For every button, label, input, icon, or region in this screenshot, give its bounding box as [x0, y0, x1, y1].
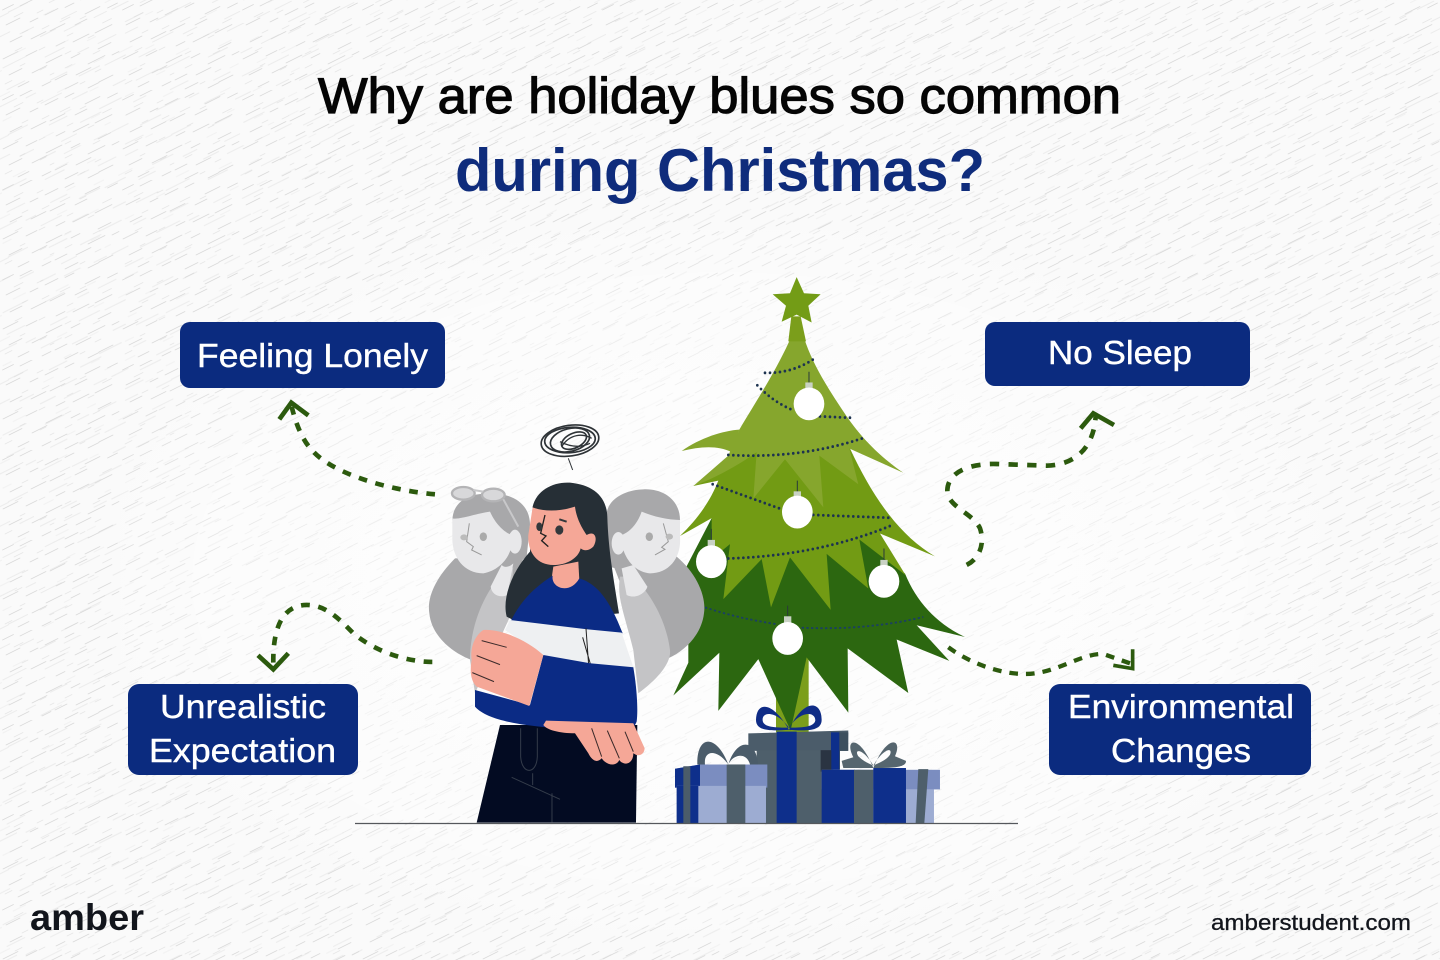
arrow: to Unrealistic Expectation	[258, 605, 432, 669]
title	[318, 68, 1121, 204]
lower hand	[543, 721, 645, 764]
label box: No Sleep	[985, 322, 1250, 386]
label box: Feeling Lonely	[180, 322, 445, 388]
scribble above head	[539, 421, 601, 470]
right gift bow	[842, 742, 906, 768]
title line 1: Why are holiday blues so common	[318, 68, 1121, 124]
amber logo: amber	[30, 897, 144, 938]
label box: Unrealistic Expectation	[128, 684, 358, 775]
neck	[551, 562, 579, 590]
sweater	[508, 576, 623, 633]
garlands	[705, 357, 923, 628]
tree upper tier	[682, 336, 903, 507]
arrow: to Feeling Lonely	[279, 403, 435, 494]
middle gift	[748, 731, 848, 823]
pants details	[512, 728, 560, 823]
upper hand	[471, 630, 543, 706]
gift bow navy	[756, 706, 822, 730]
title line 2: during Christmas?	[455, 137, 985, 204]
christmas tree	[673, 277, 965, 732]
gifts	[675, 706, 940, 823]
label box: Environmental Changes: Environmental	[1068, 688, 1294, 725]
label box: Feeling Lonely: Feeling Lonely	[197, 337, 429, 374]
tree star	[773, 277, 821, 322]
ghost figure left	[429, 487, 530, 693]
tree top cone	[788, 316, 806, 341]
trunk	[776, 656, 809, 732]
left gift	[675, 764, 767, 823]
sweater stripe	[505, 620, 633, 667]
ornaments	[696, 372, 899, 655]
label box: No Sleep: No Sleep	[1048, 334, 1192, 371]
face	[528, 507, 596, 565]
label box: Unrealistic Expectation: Unrealistic	[160, 688, 326, 725]
arrow: to No Sleep	[947, 413, 1114, 565]
pants	[477, 725, 637, 823]
right gift	[822, 768, 940, 823]
label box: Environmental Changes: Changes	[1111, 732, 1251, 769]
tree lower dark tier	[673, 518, 965, 731]
left gift bow	[697, 742, 758, 766]
tree middle tier	[680, 448, 935, 610]
face details	[541, 515, 548, 547]
woman with ghost figures	[429, 421, 704, 823]
label box: Environmental Changes	[1049, 684, 1311, 775]
ghost figure right	[607, 489, 704, 693]
label box: Unrealistic Expectation: Expectation	[149, 732, 336, 769]
hair back	[505, 483, 619, 623]
upper tier left spike	[682, 430, 739, 452]
website url: amberstudent.com	[1211, 910, 1411, 935]
sleeve	[475, 655, 637, 731]
arrow: to Environmental Changes	[948, 647, 1133, 674]
ground line	[355, 822, 1018, 824]
